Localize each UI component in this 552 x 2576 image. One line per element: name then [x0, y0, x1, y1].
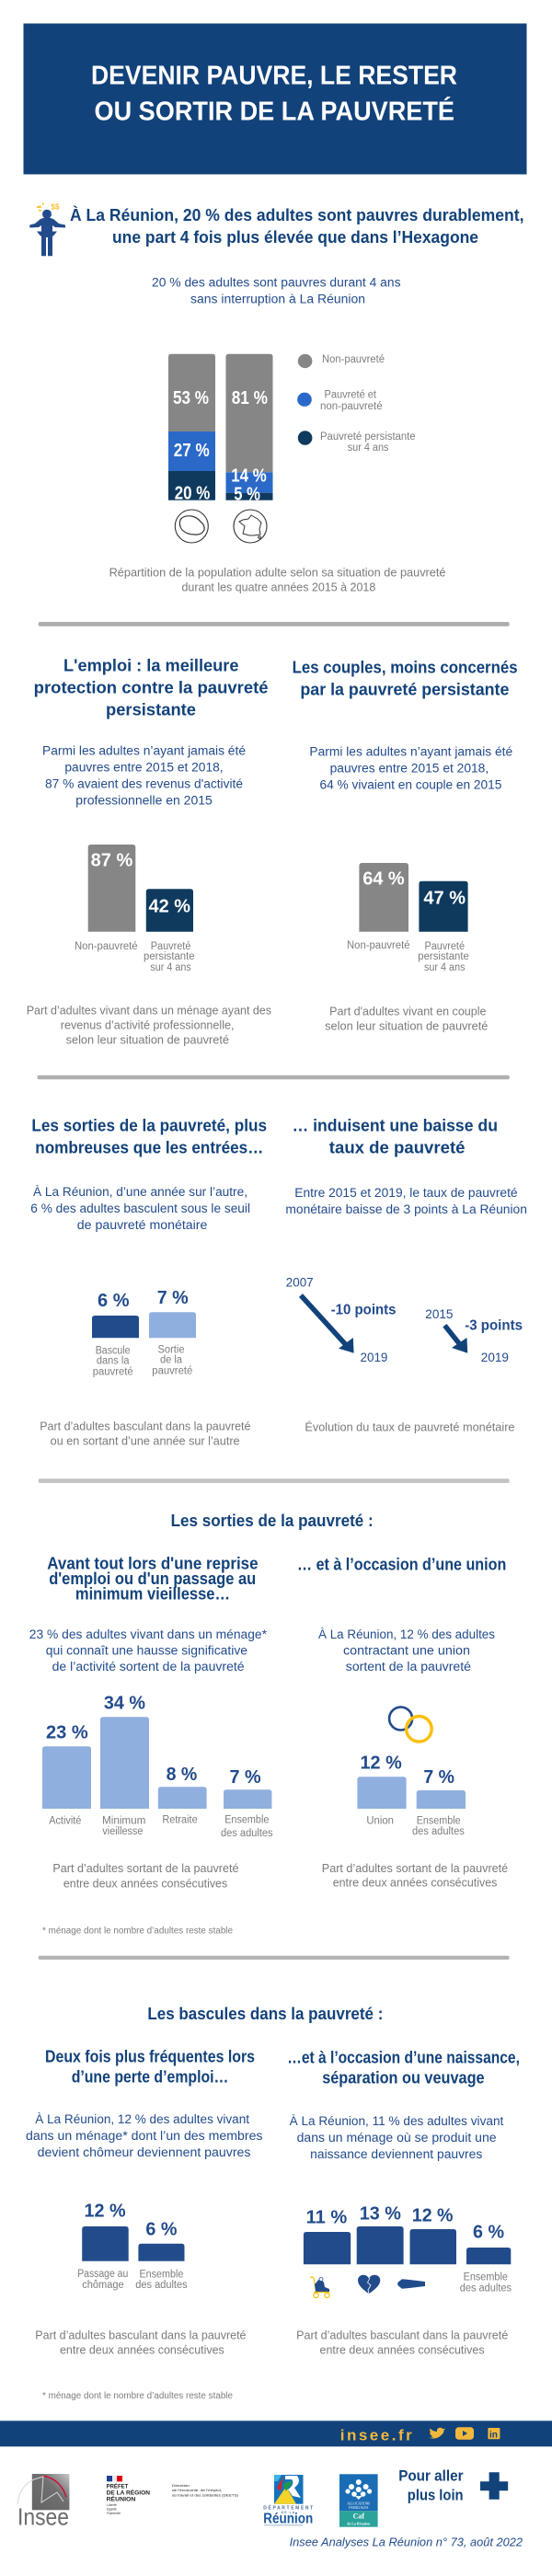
bar chart: union: 7 %: [423, 1767, 454, 1788]
logo: Département de La Réunion: Réunion: [263, 2511, 313, 2526]
caption: exits: [40, 1420, 251, 1448]
bar chart: job loss: 6 %: [145, 2219, 178, 2239]
logo: Préfet de la région Réunion: Égalité: [107, 2506, 117, 2511]
bar: La Réunion: 20 %: [175, 483, 210, 503]
logo: Préfet de la région Réunion: PRÉFET: [107, 2482, 128, 2490]
icon: map of France: [234, 510, 267, 543]
bar chart: couples: Pauvreté: [425, 941, 465, 952]
bar chart: job loss: Passage au: [77, 2269, 128, 2280]
heading: job loss: d’une perte d’emploi…: [72, 2067, 228, 2086]
caption: couples: Part d'adultes vivant en couple: [329, 1006, 487, 1018]
text block: couples: pauvres entre 2015 et 2018,: [330, 762, 489, 776]
bar chart: exits by event: Activité: [49, 1815, 81, 1826]
bar chart: job loss: chômage: [82, 2280, 124, 2291]
heading: job loss: Deux fois plus fréquentes lors: [45, 2047, 255, 2065]
bar chart: exits by event: 7 %: [230, 1767, 261, 1788]
caption: exits through union: Part d’adultes sortant de la pauvreté: [322, 1862, 508, 1875]
logo: Département de La Réunion: DE LA: [282, 2511, 295, 2514]
heading: falls into poverty: Les bascules dans la pauvreté :: [147, 2005, 383, 2023]
panel: employment: [27, 656, 271, 1047]
arrow: 2015 to 2019, -3 points: 2015: [425, 1307, 453, 1321]
caption: exits through union: entre deux années consécutives: [333, 1876, 497, 1889]
bar chart: family events: 6 %: [473, 2223, 504, 2243]
bar chart: couples: Non-pauvreté: [347, 940, 410, 951]
text block: 20 % persistent: sans interruption à La Réunion: [190, 293, 365, 305]
logo: Préfet de la région Réunion: Fraternité: [107, 2512, 121, 2515]
text block: family events: dans un ménage où se produit une: [297, 2131, 497, 2145]
text block: 20 % persistent: [152, 276, 401, 305]
icon: twitter: [429, 2428, 445, 2439]
text block: couples: [309, 745, 512, 792]
heading: exits from poverty: Les sorties de la pauvreté :: [171, 1512, 374, 1530]
bar chart: employment: [75, 845, 195, 973]
bar: Hexagone: 81 %: [232, 388, 268, 408]
icon: youtube: [455, 2427, 474, 2440]
legend: [297, 354, 416, 454]
bar chart: exits by event: [42, 1693, 273, 1839]
bar chart: family events: Ensemble: [464, 2272, 508, 2283]
logo: Préfet de la région Réunion: RÉUNION: [107, 2495, 136, 2503]
caption: exits through employment: entre deux années consécutives: [63, 1877, 227, 1890]
text block: 20 % persistent: 20 % des adultes sont pauvres durant 4 ans: [152, 276, 401, 290]
text block: family events: [290, 2114, 504, 2161]
legend item: pauvreté persistante: sur 4 ans: [348, 443, 389, 454]
bar chart: family events: des adultes: [460, 2283, 512, 2294]
caption: employment: revenus d’activité professionnelle,: [61, 1019, 234, 1032]
arrow: 2007 to 2019, -10 points: [286, 1276, 396, 1364]
caption: exits through union: [322, 1862, 508, 1889]
panel: exits through employment: [29, 1555, 273, 1937]
heading: exits through employment: [47, 1555, 258, 1603]
bar chart: entries and exits: Sortie: [158, 1345, 184, 1356]
text block: employment: [42, 744, 246, 808]
panel: couples: [293, 658, 518, 1033]
bar chart: entries and exits: pauvreté: [93, 1367, 133, 1378]
text block: family events: naissance deviennent pauvres: [310, 2147, 483, 2161]
bar chart: couples: persistante: [418, 951, 469, 962]
logo: Insee: Insee: [17, 2503, 69, 2531]
panel: exits more numerous than entries: [30, 1116, 267, 1448]
bar: Hexagone: 14 %: [231, 466, 267, 487]
text block: exits through union: contractant une union: [343, 1644, 470, 1658]
icon: map of La Réunion: [175, 510, 208, 543]
footer bar: [0, 2421, 552, 2446]
bar chart: entries and exits: dans la: [97, 1356, 130, 1367]
logo: Préfet de la région Réunion: Liberté: [107, 2503, 117, 2507]
bar chart: family events: 12 %: [412, 2205, 454, 2225]
text block: exits: de pauvreté monétaire: [77, 1218, 207, 1232]
title banner: OU SORTIR DE LA PAUVRETÉ: [94, 96, 454, 127]
bar chart: exits by event: 8 %: [167, 1765, 198, 1785]
footnote: * ménage dont le nombre d’adultes reste stable: [42, 1926, 233, 1937]
text block: exits: À La Réunion, d’une année sur l’autre,: [33, 1185, 247, 1199]
heading: employment: L'emploi : la meilleure: [63, 656, 239, 674]
heading: employment: [34, 656, 269, 719]
caption: decline: Évolution du taux de pauvreté monétaire: [305, 1420, 515, 1434]
text block: employment: professionnelle en 2015: [75, 794, 213, 808]
bar: La Réunion: 53 %: [173, 388, 209, 408]
bar chart: exits by event: Retraite: [162, 1815, 198, 1826]
bar: La Réunion: 27 %: [174, 441, 210, 461]
footnote: * ménage dont le nombre d’adultes reste stable: [42, 2391, 233, 2401]
text block: couples: 64 % vivaient en couple en 2015: [320, 778, 501, 792]
bar chart: exits by event: Ensemble: [224, 1815, 269, 1826]
caption: employment: [27, 1005, 271, 1047]
text block: couples: Parmi les adultes n’ayant jamais été: [309, 745, 512, 759]
bar chart: union: Ensemble: [417, 1815, 461, 1826]
caption: job loss: entre deux années consécutives: [60, 2344, 224, 2357]
text block: exits through union: À La Réunion, 12 % des adultes: [318, 1627, 495, 1641]
bar chart: couples: 47 %: [423, 889, 466, 909]
text block: decline: [285, 1186, 527, 1216]
arrow: 2015 to 2019, -3 points: -3 points: [465, 1317, 523, 1333]
heading: decline: [293, 1116, 498, 1156]
logo: Caf de La Réunion: [339, 2474, 378, 2527]
caption: job loss: Part d’adultes basculant dans la pauvreté: [35, 2329, 247, 2342]
bar chart: employment: sur 4 ans: [150, 962, 191, 973]
text block: exits through union: sortent de la pauvreté: [346, 1660, 471, 1673]
website link: insee.fr: [340, 2427, 412, 2444]
bar chart: employment: Non-pauvreté: [75, 941, 138, 952]
text block: employment: pauvres entre 2015 et 2018,: [64, 761, 224, 775]
heading: exits: Les sorties de la pauvreté, plus: [31, 1116, 267, 1134]
heading: employment: persistante: [106, 700, 196, 719]
bar chart: employment: persistante: [144, 951, 195, 962]
logo: Préfet de la région Réunion: [107, 2476, 150, 2515]
link: pour aller plus loin: plus loin: [408, 2487, 464, 2503]
panel: poverty rate decline: [285, 1116, 527, 1434]
bar chart: exits by event: Minimum: [102, 1815, 145, 1826]
heading: employment: protection contre la pauvreté: [34, 678, 269, 696]
chart caption: [109, 567, 446, 594]
bar chart: job loss: 12 %: [85, 2201, 126, 2221]
chart caption: Répartition de la population adulte selon sa situation de pauvreté: [109, 567, 446, 580]
legend item: pauvreté et non-pauvreté: Pauvreté et: [324, 390, 377, 401]
section heading: persistent poverty: une part 4 fois plus élevée que dans l’Hexagone: [112, 228, 478, 247]
caption: job loss: [35, 2329, 247, 2357]
text block: decline: Entre 2015 et 2019, le taux de pauvreté: [294, 1186, 518, 1200]
bar chart: entries and exits: Bascule: [96, 1346, 131, 1357]
icon: wedding rings: [389, 1708, 431, 1742]
bar chart: family events: [304, 2204, 512, 2294]
icon: linkedin: [488, 2428, 500, 2440]
text block: job loss: [26, 2112, 263, 2159]
bar chart: couples: sur 4 ans: [424, 962, 466, 973]
caption: family events: [296, 2329, 508, 2357]
heading: family events: [287, 2048, 520, 2087]
stacked bar chart: La Réunion and Hexagone: [168, 354, 272, 504]
text block: exits: [30, 1185, 250, 1232]
bar chart: union: 12 %: [361, 1753, 402, 1773]
bar chart: exits by event: 23 %: [46, 1722, 88, 1742]
bar chart: entries and exits: 6 %: [98, 1291, 130, 1311]
heading: couples: Les couples, moins concernés: [293, 658, 518, 676]
arrow: 2007 to 2019, -10 points: -10 points: [331, 1302, 396, 1317]
icon: worried person with empty pockets: $$: [52, 202, 60, 212]
logo: Insee: [17, 2474, 69, 2531]
bar chart: entries and exits: de la: [160, 1355, 183, 1366]
caption: employment: selon leur situation de pauvreté: [66, 1034, 229, 1047]
icon: plus: [480, 2472, 508, 2500]
icon: broken heart (separation): [358, 2275, 380, 2294]
heading: couples: [293, 658, 518, 698]
bar chart: job loss: des adultes: [135, 2280, 188, 2291]
text block: DEETS: du travail et des solidarités (DEETS): [172, 2493, 239, 2498]
arrow: 2007 to 2019, -10 points: 2019: [361, 1351, 387, 1364]
heading: exits through employment: Avant tout lors d'une reprise: [47, 1555, 258, 1573]
caption: family events: entre deux années consécutives: [320, 2344, 485, 2357]
text block: DEETS: [172, 2483, 239, 2498]
bar chart: couples: 64 %: [362, 869, 405, 890]
bar: Hexagone: [226, 354, 272, 504]
bar chart: family events: 13 %: [360, 2204, 401, 2225]
title banner: DEVENIR PAUVRE, LE RESTER: [91, 62, 457, 91]
caption: exits through employment: Part d’adultes sortant de la pauvreté: [52, 1862, 239, 1875]
text block: exits through employment: 23 % des adultes vivant dans un ménage*: [29, 1627, 268, 1641]
text block: employment: Parmi les adultes n’ayant jamais été: [42, 744, 246, 758]
bar chart: union: [357, 1753, 466, 1837]
bar chart: job loss: [77, 2201, 188, 2291]
heading: exits through employment: minimum vieillesse…: [75, 1584, 230, 1603]
caption: couples: selon leur situation de pauvreté: [325, 1020, 488, 1033]
caption: exits through employment: [52, 1862, 239, 1890]
bar chart: job loss: Ensemble: [140, 2270, 183, 2281]
chart caption: durant les quatre années 2015 à 2018: [182, 581, 375, 594]
text block: exits through employment: [29, 1627, 268, 1673]
section heading: persistent poverty: À La Réunion, 20 % des adultes sont pauvres durablement,: [70, 205, 524, 224]
heading: family events: …et à l’occasion d’une naissance,: [287, 2048, 520, 2066]
icon: stroller (birth): [311, 2277, 329, 2298]
text block: DEETS: Direction: [172, 2483, 190, 2488]
icon: coffin (widowhood): [397, 2279, 425, 2289]
bar: Hexagone: 5 %: [234, 484, 260, 504]
icon: linkedin: in: [489, 2431, 498, 2440]
heading: exits: [31, 1116, 267, 1156]
heading: decline: taux de pauvreté: [329, 1138, 466, 1156]
logo: Département de La Réunion: DÉPARTEMENT: [263, 2504, 313, 2512]
icon: worried person with empty pockets: [29, 202, 65, 256]
bar chart: family events: 11 %: [306, 2207, 348, 2227]
logo: Caf de La Réunion: de La Réunion: [347, 2521, 371, 2526]
text block: job loss: devient chômeur deviennent pauvres: [38, 2145, 251, 2159]
heading: exits through union: … et à l’occasion d’une union: [297, 1556, 506, 1574]
caption: exits: Part d’adultes basculant dans la pauvreté: [40, 1420, 251, 1433]
bar chart: exits by event: vieillesse: [102, 1826, 143, 1837]
bar chart: entries and exits: pauvreté: [152, 1366, 192, 1377]
arrow: 2007 to 2019, -10 points: 2007: [286, 1276, 314, 1290]
heading: exits through employment: d'emploi ou d'un passage au: [49, 1570, 256, 1588]
text block: exits: 6 % des adultes basculent sous le seuil: [30, 1202, 250, 1215]
bar chart: union: des adultes: [412, 1826, 465, 1837]
bar chart: entries and exits: [92, 1288, 196, 1378]
logo: Caf de La Réunion: FAMILIALES: [349, 2506, 368, 2510]
caption: exits: ou en sortant d’une année sur l’autre: [51, 1435, 240, 1448]
panel: falls through job loss: [26, 2047, 263, 2401]
text block: DEETS: de l'économie, de l'emploi,: [172, 2488, 222, 2492]
heading: family events: séparation ou veuvage: [322, 2068, 485, 2087]
logo: Département de La Réunion: [263, 2475, 313, 2526]
text block: exits through employment: qui connaît une hausse significative: [46, 1644, 247, 1658]
link: pour aller plus loin: [398, 2468, 508, 2503]
text block: job loss: À La Réunion, 12 % des adultes vivant: [35, 2112, 249, 2126]
link: pour aller plus loin: Pour aller: [398, 2468, 464, 2485]
bar chart: exits by event: 34 %: [104, 1693, 145, 1713]
panel: falls through family events: [287, 2048, 520, 2357]
section heading: persistent poverty: [70, 205, 524, 247]
legend item: pauvreté et non-pauvreté: [297, 390, 383, 412]
caption: family events: Part d’adultes basculant dans la pauvreté: [296, 2329, 508, 2342]
heading: decline: … induisent une baisse du: [293, 1116, 498, 1134]
logo: Caf de La Réunion: ALLOCATIONS: [347, 2502, 370, 2506]
caption: couples: [325, 1006, 488, 1033]
title banner: [24, 24, 526, 175]
legend item: pauvreté et non-pauvreté: non-pauvreté: [320, 401, 383, 412]
source citation: Insee Analyses La Réunion n° 73, août 2022: [290, 2535, 523, 2548]
text block: job loss: dans un ménage* dont l’un des membres: [26, 2129, 263, 2143]
bar chart: employment: Pauvreté: [151, 941, 190, 952]
bar chart: employment: 42 %: [149, 897, 190, 917]
heading: couples: par la pauvreté persistante: [300, 680, 509, 698]
text block: exits through union: [318, 1627, 495, 1673]
logo: Préfet de la région Réunion: DE LA RÉGION: [107, 2489, 150, 2497]
text block: exits through employment: de l’activité sortent de la pauvreté: [52, 1660, 245, 1673]
text block: decline: monétaire baisse de 3 points à La Réunion: [285, 1202, 527, 1216]
legend item: pauvreté persistante: Pauvreté persistante: [320, 431, 416, 443]
text block: employment: 87 % avaient des revenus d'activité: [45, 777, 243, 791]
arrow: 2015 to 2019, -3 points: [425, 1307, 523, 1364]
panel: exits through union: [297, 1556, 508, 1889]
logo: Caf de La Réunion: Caf: [353, 2512, 364, 2521]
legend item: non-pauvreté: Non-pauvreté: [322, 354, 385, 365]
arrow: 2015 to 2019, -3 points: 2019: [481, 1351, 509, 1364]
caption: employment: Part d’adultes vivant dans un ménage ayant des: [27, 1005, 271, 1018]
bar: La Réunion: [168, 354, 215, 503]
heading: job loss: [45, 2047, 255, 2086]
bar chart: union: Union: [366, 1815, 394, 1826]
text block: family events: À La Réunion, 11 % des adultes vivant: [290, 2114, 504, 2128]
legend item: pauvreté persistante: [298, 431, 416, 454]
heading: exits: nombreuses que les entrées…: [35, 1138, 263, 1156]
bar chart: couples: [347, 863, 469, 973]
bar chart: entries and exits: 7 %: [157, 1288, 189, 1308]
bar chart: employment: 87 %: [91, 851, 133, 871]
bar chart: exits by event: des adultes: [221, 1828, 273, 1839]
